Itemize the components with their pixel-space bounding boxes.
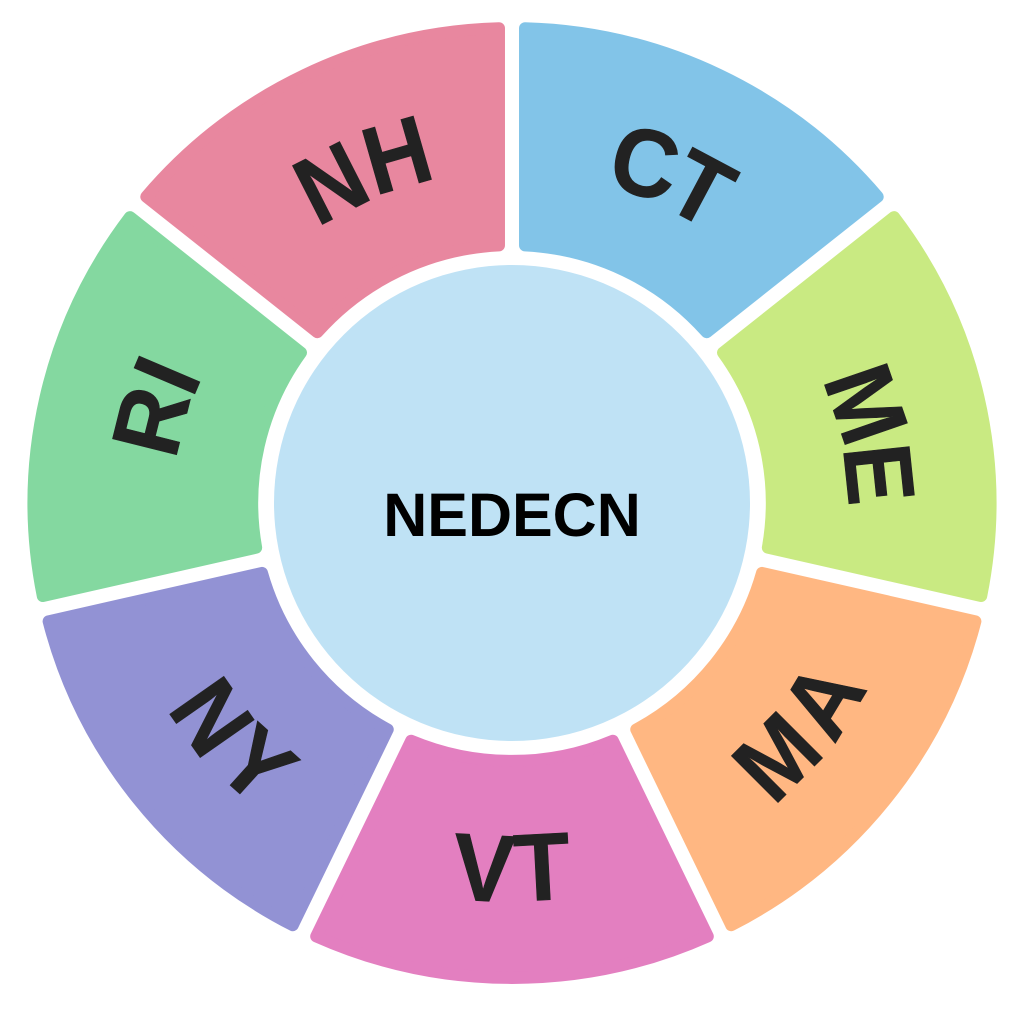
segment: VT: V [451, 813, 518, 923]
segment: MA: M [713, 693, 841, 821]
segment: RI: R [91, 376, 211, 466]
segment: NH [146, 28, 499, 332]
center circle [274, 265, 750, 741]
segment: NH: N [278, 120, 384, 246]
segment: CT: T [651, 128, 751, 249]
segment: MA [636, 573, 975, 925]
segment: VT [316, 741, 708, 978]
segment: ME: E [823, 438, 935, 510]
segment: RI [34, 217, 301, 596]
segment: MA: A [760, 644, 886, 756]
segment: CT: C [601, 103, 690, 223]
segment: NY: N [149, 660, 275, 774]
segment: NY: Y [198, 705, 316, 825]
segment: RI: I [113, 343, 221, 407]
segment: ME [723, 217, 990, 596]
segment: NH: H [351, 95, 443, 216]
segment: CT [525, 28, 878, 332]
segment: VT: T [511, 812, 573, 922]
segment: NY [49, 573, 388, 925]
center label: NEDECN [383, 481, 641, 549]
segment: ME: M [803, 351, 929, 457]
